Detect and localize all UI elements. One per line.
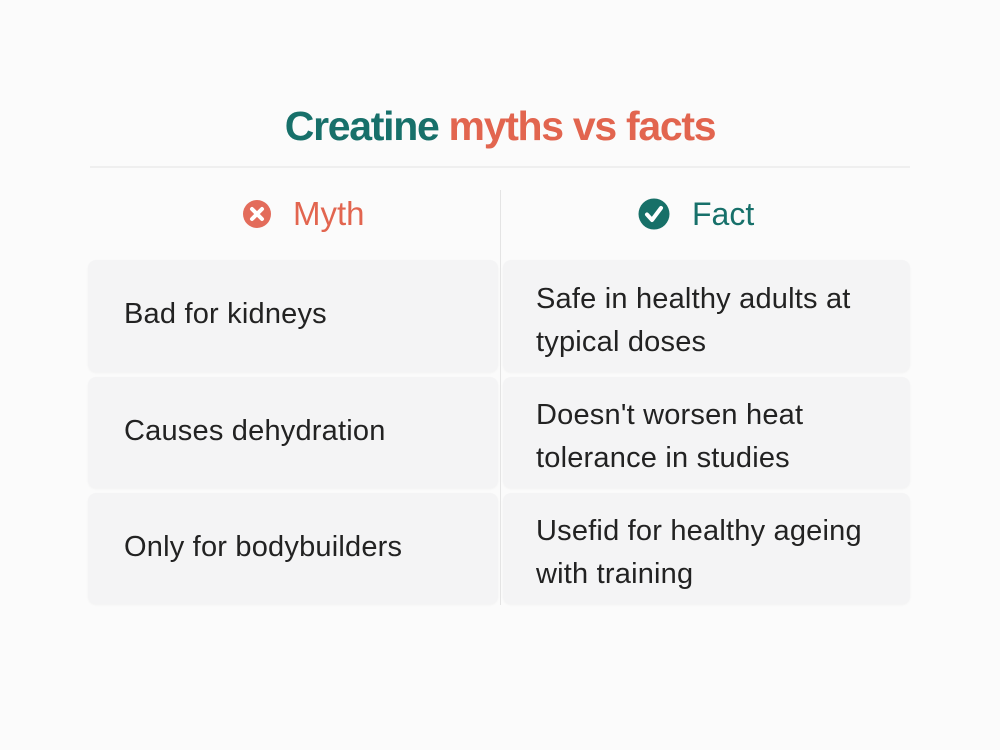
header: myth [243,195,365,232]
icon: check circle [638,198,670,230]
label fact: Fact [692,196,754,232]
row 3 fact: with training [536,558,693,590]
row 3 fact: Usefid for healthy ageing [536,515,862,547]
row 2 fact [503,377,910,488]
row 1 fact: typical doses [536,326,706,358]
row 3 myth: Only for bodybuilders [124,531,402,563]
row 1 fact: Safe in healthy adults at [536,283,851,315]
row 2 fact: tolerance in studies [536,442,790,474]
title: Creatine myths vs facts [285,103,715,149]
row 1 myth: Bad for kidneys [124,298,327,330]
icon: x circle [243,200,271,228]
row 2 myth: Causes dehydration [124,415,386,447]
label myth: Myth [293,195,365,232]
row 1 myth [88,260,498,372]
header: fact [638,196,754,232]
row 2 fact: Doesn't worsen heat [536,399,803,431]
row 1 fact [503,260,910,372]
row 3 fact [503,493,910,604]
row 2 myth [88,377,498,488]
row 3 myth [88,493,498,604]
